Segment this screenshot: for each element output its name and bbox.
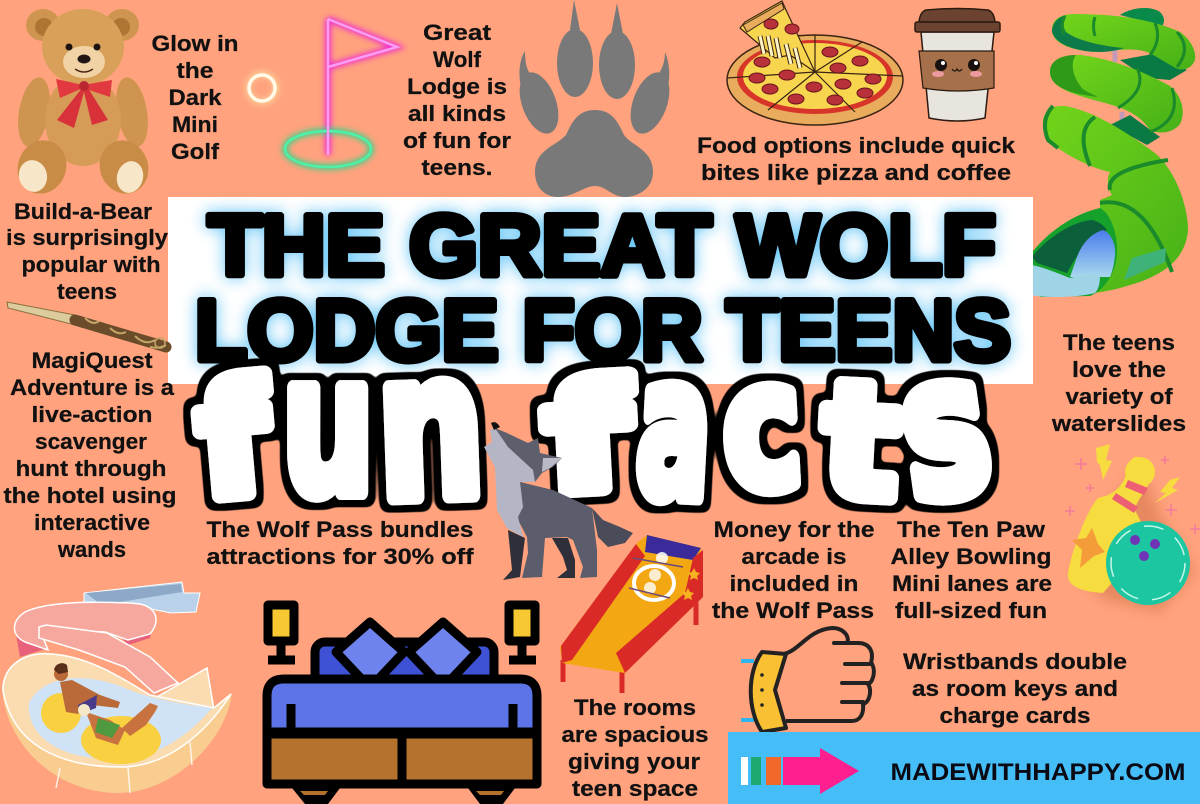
fact: great wolf lodge is fun for teens: Lodge is [407, 74, 507, 99]
fact: the teens love the waterslides: love the [1072, 357, 1166, 382]
fun facts bubble heading: c [718, 324, 806, 531]
icon: green spiral waterslide [1020, 8, 1195, 297]
fact: glow in the dark mini golf: Glow in [152, 31, 238, 56]
fact: wristbands [903, 649, 1127, 728]
fact: ten paw alley: The Ten Paw [897, 517, 1046, 542]
fact: build-a-bear [6, 199, 169, 304]
icon: kawaii coffee cup [915, 8, 1000, 121]
fun facts bubble heading: a [632, 313, 717, 544]
fact: ten paw alley [890, 517, 1052, 623]
fact: glow in the dark mini golf: the [176, 58, 214, 83]
fact: arcade money: the Wolf Pass [712, 598, 874, 623]
fact: magiquest adventure: scavenger [35, 429, 147, 454]
fact: wristbands: charge cards [940, 703, 1090, 728]
fact: food options: bites like pizza and coffee [701, 160, 1011, 185]
fact: ten paw alley: Mini lanes are [892, 571, 1052, 596]
fact: rooms are spacious: teen space [572, 776, 698, 801]
fact: arcade money: included in [730, 571, 858, 596]
icon: magic wand [7, 302, 166, 348]
fact: rooms are spacious: giving your [568, 749, 700, 774]
fact: wristbands: as room keys and [912, 676, 1118, 701]
fact: food options [697, 133, 1016, 185]
fact: rooms are spacious: The rooms [574, 695, 696, 720]
main title [195, 198, 1011, 379]
fact: great wolf lodge is fun for teens: Great [423, 20, 492, 45]
icon: waterpark slide with riders [2, 582, 232, 793]
fun facts bubble heading [191, 309, 1003, 546]
fact: the teens love the waterslides: variety of [1066, 384, 1173, 409]
fact: build-a-bear: teens [57, 279, 117, 304]
fact: magiquest adventure: interactive [34, 510, 150, 535]
fact: wolf pass bundles: attractions for 30% off [206, 544, 474, 569]
fact: magiquest adventure: hunt through [16, 456, 166, 481]
fun facts bubble heading: n [374, 309, 488, 546]
fact: ten paw alley: Alley Bowling [890, 544, 1052, 569]
fact: the teens love the waterslides: The teens [1063, 330, 1175, 355]
icon: bed with lamps and pillows [267, 605, 537, 804]
fact: rooms are spacious [562, 695, 708, 801]
fact: food options: Food options include quick [697, 133, 1016, 158]
icon: bowling pin and ball [1065, 444, 1200, 612]
fun facts bubble heading: u [282, 316, 374, 537]
main title: THE GREAT WOLF [208, 198, 996, 294]
fact: wolf pass bundles: The Wolf Pass bundles [206, 517, 474, 542]
fact: the teens love the waterslides: waterslides [1051, 411, 1186, 436]
fact: great wolf lodge is fun for teens: of fun for [403, 128, 511, 153]
fact: magiquest adventure [4, 348, 176, 562]
fact: rooms are spacious: are spacious [562, 722, 708, 747]
fact: great wolf lodge is fun for teens: Wolf [433, 47, 482, 72]
website banner [728, 732, 1200, 804]
fact: great wolf lodge is fun for teens: all kinds [408, 101, 506, 126]
icon: skee-ball machine [560, 535, 703, 693]
title panel [168, 197, 1033, 384]
fact: arcade money: Money for the [714, 517, 874, 542]
icon: neon golf flag and ball [248, 19, 397, 167]
icon: fist with wristband [741, 628, 874, 732]
fact: magiquest adventure: the hotel using [4, 483, 176, 508]
fact: arcade money [712, 517, 874, 623]
fact: the teens love the waterslides [1051, 330, 1186, 436]
fun facts bubble heading: f [191, 347, 278, 534]
fun facts bubble heading: f [541, 350, 636, 526]
fact: build-a-bear: Build-a-Bear [14, 199, 152, 224]
fact: glow in the dark mini golf: Dark [168, 85, 222, 110]
fact: glow in the dark mini golf [152, 31, 238, 164]
main title: LODGE FOR TEENS [195, 283, 1011, 379]
icon: teddy bear [10, 9, 156, 201]
fun facts bubble heading: s [886, 309, 1003, 546]
fact: magiquest adventure: live-action [32, 402, 152, 427]
fact: ten paw alley: full-sized fun [895, 598, 1047, 623]
fact: magiquest adventure: Adventure is a [10, 375, 175, 400]
fact: great wolf lodge is fun for teens [403, 20, 511, 180]
fact: magiquest adventure: MagiQuest [32, 348, 153, 373]
icon: wolf paw print [512, 0, 677, 197]
fact: magiquest adventure: wands [57, 537, 126, 562]
fact: build-a-bear: popular with [22, 252, 160, 277]
icon: pizza [727, 1, 903, 125]
fact: arcade money: arcade is [742, 544, 846, 569]
fact: great wolf lodge is fun for teens: teens. [422, 155, 492, 180]
icon: howling wolf [484, 422, 633, 580]
fact: wristbands: Wristbands double [903, 649, 1127, 674]
fun facts bubble heading: t [818, 348, 904, 536]
fact: glow in the dark mini golf: Mini [172, 112, 218, 137]
fact: glow in the dark mini golf: Golf [171, 139, 220, 164]
fact: build-a-bear: is surprisingly [6, 225, 169, 250]
fact: wolf pass bundles [206, 517, 474, 569]
website banner: MADEWITHHAPPY.COM [890, 759, 1186, 786]
